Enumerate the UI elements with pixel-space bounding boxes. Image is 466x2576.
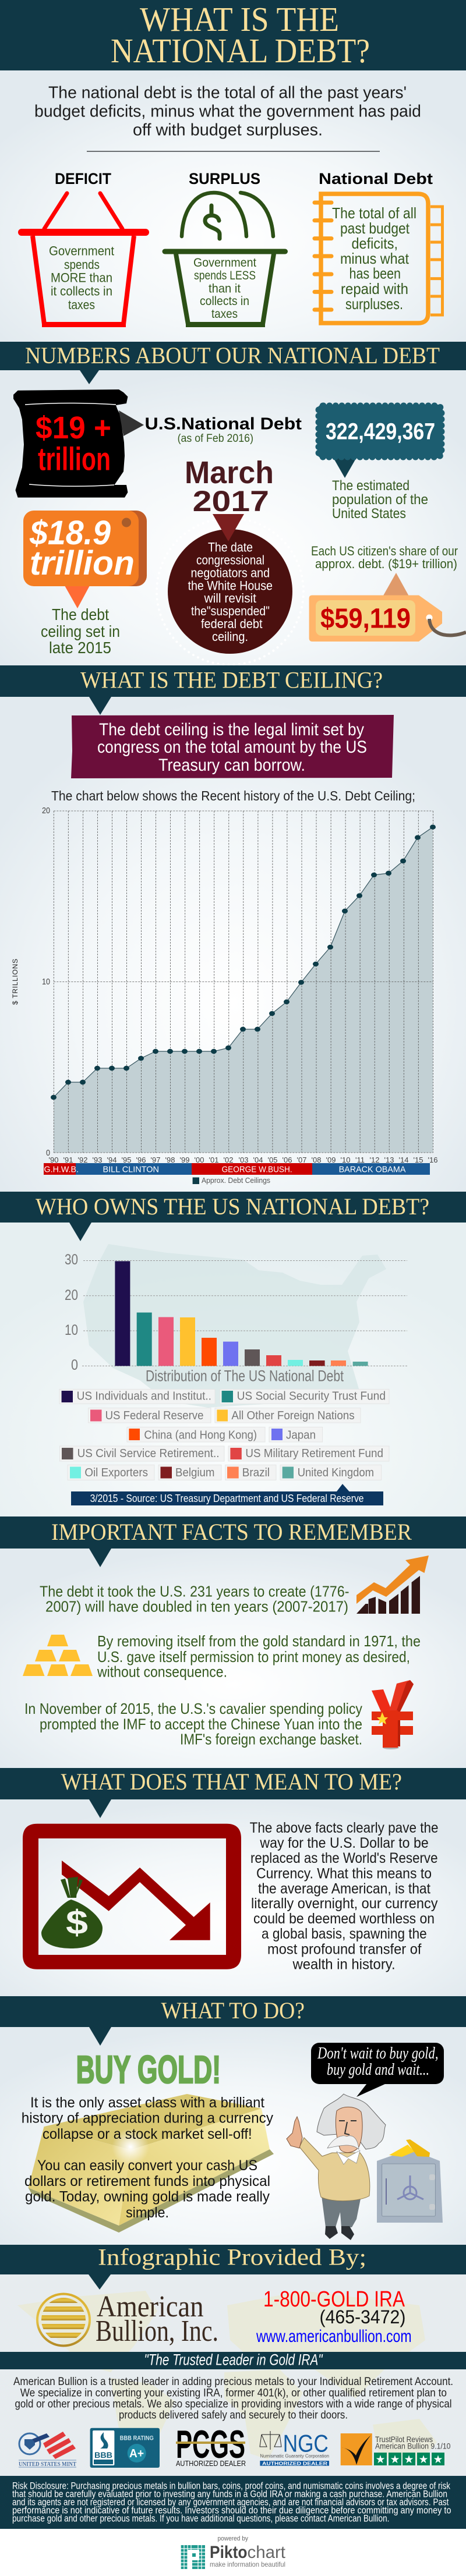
risk disclosure: purchase gold and other precious metals. If you have additional questions, please contact American Bullion. xyxy=(12,2514,389,2524)
logo: NGC xyxy=(260,2430,329,2466)
callout: march 2017 date: the"suspended" xyxy=(191,604,270,618)
speech bubble: buy gold and wait... xyxy=(327,2061,429,2079)
contact details xyxy=(256,2287,412,2346)
logo: PCGS xyxy=(176,2422,246,2468)
text: U.S. national debt: (as of Feb 2016) xyxy=(178,433,253,445)
logo: TrustPilot xyxy=(341,2433,451,2466)
text: what it means: literally overnight, our currency xyxy=(251,1895,438,1912)
chart legend: Approx. Debt Ceilings xyxy=(202,1176,270,1185)
panel: surplus xyxy=(162,170,288,327)
x axis labels: '90 xyxy=(49,1156,58,1164)
deficit text: MORE than xyxy=(51,271,112,285)
text: what it means: replaced as the World's Reserve xyxy=(250,1850,438,1866)
national debt text xyxy=(332,204,416,313)
intro text: off with budget surpluses. xyxy=(133,121,323,140)
icon: piktochart mark xyxy=(181,2545,205,2569)
surplus text: than it xyxy=(209,282,241,296)
intro text: The national debt is the total of all the past years' xyxy=(48,84,407,102)
national debt text: minus what xyxy=(340,250,409,267)
bar chart legend: All Other Foreign Nations xyxy=(231,1409,355,1422)
surplus heading: SURPLUS xyxy=(189,170,260,187)
national debt text: The total of all xyxy=(332,204,416,222)
bar chart: debt holders: Distribution of The US National Debt xyxy=(146,1367,344,1384)
text: population caption: United States xyxy=(332,506,406,522)
text: what it means: a global basis, spawning the xyxy=(262,1926,427,1942)
x axis labels: '04 xyxy=(253,1156,263,1164)
x axis labels: '93 xyxy=(93,1156,102,1164)
footer: powered by piktochart: powered by xyxy=(218,2535,248,2542)
x axis labels: '16 xyxy=(428,1156,437,1164)
x axis labels: '05 xyxy=(268,1156,277,1164)
bar chart: debt holders: 0 xyxy=(71,1357,78,1373)
logo: NGC: AUTHORIZED DEALER xyxy=(262,2461,327,2466)
y axis labels: $ TRILLIONS xyxy=(11,959,19,1005)
x axis labels: '15 xyxy=(414,1156,423,1164)
x axis labels: '09 xyxy=(326,1156,336,1164)
x axis labels: '07 xyxy=(297,1156,306,1164)
fact: debt doubled: 2007) will have doubled in ten years (2007-2017) xyxy=(45,1598,348,1615)
callout: population xyxy=(317,405,443,478)
legs and shoes xyxy=(322,2196,361,2240)
x axis labels: '97 xyxy=(151,1156,160,1164)
x axis labels: '02 xyxy=(224,1156,233,1164)
section heading: who owns xyxy=(0,1192,466,1241)
text: debt ceiling caption: ceiling set in xyxy=(41,622,120,640)
text: debt ceiling caption: The debt xyxy=(52,605,109,623)
callout: march 2017 date: the White House xyxy=(188,579,273,593)
logo: American Bullion: American xyxy=(97,2290,204,2323)
section heading: what to do xyxy=(0,1996,466,2046)
section heading: what does it mean: WHAT DOES THAT MEAN TO ME? xyxy=(61,1769,402,1795)
bar chart legend: US Individuals and Institut.. xyxy=(77,1390,211,1403)
icon: orange notebook xyxy=(315,194,443,323)
icon: red basket xyxy=(18,193,149,327)
fact: IMF yuan xyxy=(24,1700,362,1748)
footer: powered by piktochart: chart xyxy=(247,2543,286,2562)
x axis labels: '08 xyxy=(312,1156,321,1164)
logo: BBB rating: BBB xyxy=(94,2450,112,2460)
text: what it means: the average American, is that xyxy=(258,1881,430,1897)
callout: $19 trillion scroll xyxy=(13,389,128,498)
x axis labels: '06 xyxy=(283,1156,292,1164)
illustration: safe with gold xyxy=(377,2139,443,2223)
title banner xyxy=(0,0,466,70)
text: what it means: The above facts clearly pave the xyxy=(250,1820,438,1836)
surplus text: Government xyxy=(193,256,256,270)
x axis labels: '01 xyxy=(209,1156,218,1164)
text: population caption: The estimated xyxy=(332,478,409,494)
text: population caption xyxy=(332,478,428,522)
bar chart legend: Brazil xyxy=(242,1466,270,1479)
y axis labels: 0 xyxy=(46,1148,50,1158)
section heading: numbers xyxy=(0,342,466,384)
logo: PCGS: AUTHORIZED DEALER xyxy=(176,2460,246,2468)
x axis labels: '98 xyxy=(165,1156,175,1164)
x axis labels: '00 xyxy=(195,1156,204,1164)
section heading: what does it mean xyxy=(0,1768,466,1818)
president bar: GEORGE W.BUSH. xyxy=(222,1165,292,1175)
president bar: BILL CLINTON xyxy=(103,1165,159,1175)
line chart: debt ceiling history xyxy=(11,806,437,1185)
sweater xyxy=(299,2138,370,2201)
icon: rising chart xyxy=(356,1555,429,1614)
text: debt ceiling caption xyxy=(41,605,120,657)
logo: BBB rating: A+ xyxy=(129,2447,144,2460)
deficit text: Government xyxy=(49,244,114,258)
title banner: NATIONAL DEBT? xyxy=(111,31,370,70)
callout: march 2017 date: federal debt xyxy=(201,616,262,631)
callout: march 2017 date: negotiators and xyxy=(191,565,270,580)
callout: $18.9 trillion tag: $18.9 xyxy=(29,514,111,552)
bar chart legend: US Civil Service Retirement.. xyxy=(77,1447,219,1460)
x axis labels: '10 xyxy=(341,1156,350,1164)
text: buy gold body: It is the only asset class with a brilliant xyxy=(30,2095,264,2111)
y axis labels: 20 xyxy=(42,806,50,816)
national debt text: surpluses. xyxy=(345,295,403,313)
national debt text: has been xyxy=(350,265,401,282)
bar chart legend: US Military Retirement Fund xyxy=(245,1447,383,1460)
section heading: provided by: Infographic Provided By; xyxy=(98,2244,366,2270)
icon: gold bars pile xyxy=(23,1635,93,1676)
logo: BBB rating xyxy=(90,2428,160,2468)
bar chart legend: Oil Exporters xyxy=(84,1466,148,1479)
logo: American Bullion: Bullion, Inc. xyxy=(96,2315,218,2348)
deficit text xyxy=(49,244,114,312)
logo: American Bullion xyxy=(35,2290,218,2348)
x axis labels: '11 xyxy=(355,1156,365,1164)
text: chart intro: The chart below shows the Recent history of the U.S. Debt Ceiling; xyxy=(51,788,415,803)
x axis labels xyxy=(49,1156,437,1164)
logo: TrustPilot: ★ xyxy=(375,2454,386,2466)
bar chart legend: United Kingdom xyxy=(298,1466,374,1479)
contact details: 1-800-GOLD IRA xyxy=(263,2287,405,2312)
text: what it means: could be deemed worthless on xyxy=(253,1911,435,1927)
text: citizen share caption: approx. debt. ($19+ trillion) xyxy=(315,557,457,571)
x axis labels: '94 xyxy=(107,1156,116,1164)
callout: march 2017 date: ceiling. xyxy=(212,629,248,644)
footer: powered by piktochart: Pikto xyxy=(210,2543,247,2562)
raised arm and hand xyxy=(287,2117,302,2148)
logo: TrustPilot: TrustPilot Reviews xyxy=(375,2435,433,2444)
tagline band xyxy=(0,2351,466,2369)
x axis labels: '91 xyxy=(63,1156,73,1164)
fact: IMF yuan: prompted the IMF to accept the Chinese Yuan into the xyxy=(40,1716,362,1733)
icon: money bag: $ xyxy=(66,1904,88,1941)
president bar: BARACK OBAMA xyxy=(339,1165,405,1175)
logo: NGC: NGC xyxy=(283,2430,329,2457)
callout: march 2017 date: March xyxy=(185,455,274,490)
president bar xyxy=(44,1163,430,1175)
callout: $59,119 price tag: $59,119 xyxy=(320,604,411,635)
text: what it means: most profound transfer of xyxy=(267,1941,422,1958)
background map: USA xyxy=(83,1244,386,1408)
bar chart legend: Japan xyxy=(286,1429,316,1441)
surplus text: spends LESS xyxy=(194,269,256,282)
national debt heading: National Debt xyxy=(319,170,433,187)
text: population caption: population of the xyxy=(332,492,428,508)
text: buy gold body: You can easily convert your cash US xyxy=(37,2157,257,2174)
section heading: what to do: WHAT TO DO? xyxy=(161,1997,305,2024)
x axis labels: '03 xyxy=(239,1156,248,1164)
x axis labels: '96 xyxy=(136,1156,146,1164)
deficit text: it collects in xyxy=(51,284,112,298)
callout: $19 trillion scroll: trillion xyxy=(38,440,111,477)
text: buy gold body xyxy=(22,2095,273,2221)
section heading: important facts: IMPORTANT FACTS TO REMEMBER xyxy=(51,1519,412,1545)
x axis labels: '95 xyxy=(122,1156,131,1164)
speech bubble xyxy=(311,2043,444,2097)
background: world map xyxy=(17,2291,437,2468)
section heading: provided by xyxy=(0,2244,466,2290)
contact details: (465-3472) xyxy=(319,2306,405,2327)
logo: NGC: Numismatic Guaranty Corporation xyxy=(260,2454,329,2459)
intro text xyxy=(34,84,421,140)
intro text: budget deficits, minus what the government has paid xyxy=(34,102,421,121)
callout: debt ceiling definition: The debt ceiling is the legal limit set by xyxy=(99,720,364,739)
callout: $18.9 trillion tag xyxy=(23,511,147,608)
logo: BBB rating: BBB RATING xyxy=(120,2435,154,2442)
logo: TrustPilot: ★ xyxy=(433,2454,443,2466)
fact: gold standard: U.S. gave itself permission to print money as desired, xyxy=(97,1648,410,1666)
panel: national debt xyxy=(315,170,443,323)
icon: falling chart frame xyxy=(23,1824,241,1969)
collar xyxy=(337,2150,360,2164)
text: U.S. national debt: U.S.National Debt xyxy=(144,414,302,433)
callout: population: 322,429,367 xyxy=(326,419,435,445)
source note: 3/2015 - Source: US Treasury Department and US Federal Reserve xyxy=(90,1493,363,1504)
surplus text: taxes xyxy=(211,307,238,321)
logo: TrustPilot: ★ xyxy=(418,2454,429,2466)
x axis labels: '14 xyxy=(399,1156,408,1164)
illustration: gold bar xyxy=(28,2094,274,2233)
callout: march 2017 date: congressional xyxy=(196,553,264,568)
illustration: einstein cartoon xyxy=(287,2094,386,2240)
fact: debt doubled xyxy=(40,1583,350,1615)
bar chart legend: US Federal Reserve xyxy=(105,1409,204,1422)
eyes xyxy=(339,2121,356,2135)
text: buy gold body: dollars or retirement funds into physical xyxy=(24,2173,270,2189)
callout: $18.9 trillion tag: trillion xyxy=(30,544,135,582)
text: what it means: wealth in history. xyxy=(292,1957,396,1973)
fact: gold standard: without consequence. xyxy=(97,1663,227,1681)
deficit text: spends xyxy=(64,257,100,272)
data points xyxy=(51,824,436,1100)
bar chart: debt holders: 20 xyxy=(65,1287,78,1303)
source note xyxy=(71,1484,383,1505)
mustache xyxy=(327,2136,359,2149)
callout: debt ceiling definition xyxy=(71,715,394,778)
title banner: WHAT IS THE xyxy=(140,0,339,38)
hair xyxy=(317,2094,386,2149)
text: U.S. national debt xyxy=(144,414,302,445)
text: debt ceiling caption: late 2015 xyxy=(49,639,111,657)
icon: green basket with dollar xyxy=(162,193,288,327)
logo: PCGS: PCGS xyxy=(176,2422,245,2467)
text: what it means: way for the U.S. Dollar to be xyxy=(259,1835,429,1851)
footer: powered by piktochart xyxy=(181,2535,286,2569)
callout: debt ceiling definition: Treasury can borrow. xyxy=(158,756,305,775)
y axis labels: 10 xyxy=(42,977,50,987)
callout: debt ceiling definition: congress on the total amount by the US xyxy=(97,738,367,757)
fact: IMF yuan: In November of 2015, the U.S.'s cavalier spending policy xyxy=(24,1700,362,1717)
callout: $19 trillion scroll: $19 + xyxy=(36,410,111,445)
section heading: numbers: NUMBERS ABOUT OUR NATIONAL DEBT xyxy=(25,342,440,368)
logo: US Mint xyxy=(19,2432,77,2468)
fact: IMF yuan: IMF's foreign exchange basket. xyxy=(180,1731,362,1748)
icon: money bag xyxy=(41,1877,103,1948)
bar chart legend: US Social Security Trust Fund xyxy=(237,1390,386,1403)
text: buy gold body: gold. Today, owning gold is made really xyxy=(25,2189,270,2205)
bar chart legend xyxy=(59,1389,389,1480)
x axis labels: '99 xyxy=(180,1156,189,1164)
section heading: who owns: WHO OWNS THE US NATIONAL DEBT? xyxy=(36,1193,429,1220)
text: buy gold body: history of appreciation during a currency xyxy=(22,2110,273,2127)
deficit text: taxes xyxy=(68,297,95,312)
national debt text: past budget xyxy=(340,219,410,237)
deficit heading: DEFICIT xyxy=(55,170,111,187)
section heading: debt ceiling: WHAT IS THE DEBT CEILING? xyxy=(80,667,383,693)
bar chart: debt holders xyxy=(65,1252,407,1384)
callout: march 2017 date: will revisit xyxy=(204,591,256,605)
contact details: www.americanbullion.com xyxy=(256,2327,412,2346)
footer: powered by piktochart: make information beautiful xyxy=(210,2560,285,2568)
face xyxy=(336,2107,362,2153)
fact: debt doubled: The debt it took the U.S. 231 years to create (1776- xyxy=(40,1583,350,1600)
bar chart: debt holders: 30 xyxy=(65,1252,78,1268)
text: buy gold body: collapse or a stock market sell-off! xyxy=(43,2126,252,2142)
y axis labels xyxy=(11,806,50,1158)
text: citizen share caption xyxy=(311,544,458,571)
text: what it means: Currency. What this means to xyxy=(256,1866,432,1882)
bar chart: debt holders: 10 xyxy=(65,1322,78,1338)
surplus text: collects in xyxy=(200,295,249,308)
x axis labels: '92 xyxy=(78,1156,87,1164)
logo: TrustPilot: ★ xyxy=(404,2454,414,2466)
text: buy gold body: simple. xyxy=(126,2205,169,2221)
callout: march 2017 date: The date xyxy=(208,540,253,554)
heading: buy gold: BUY GOLD! xyxy=(76,2048,221,2092)
logo: TrustPilot: American Bullion 9.1/10 xyxy=(375,2442,451,2451)
panel: deficit xyxy=(18,170,149,327)
bar chart legend: Belgium xyxy=(175,1466,214,1479)
speech bubble: Don't wait to buy gold, xyxy=(317,2044,438,2063)
x axis labels: '12 xyxy=(370,1156,379,1164)
section heading: debt ceiling xyxy=(0,665,466,715)
callout: march 2017 date: 2017 xyxy=(193,485,269,518)
risk disclosure xyxy=(0,2476,466,2529)
national debt text: repaid with xyxy=(341,280,408,297)
text: about american bullion: products delivered safely and securely to their doors. xyxy=(119,2408,348,2421)
callout: march 2017 date xyxy=(157,455,303,665)
national debt text: deficits, xyxy=(352,235,398,252)
icon: red yuan sign xyxy=(372,1680,414,1749)
bar chart legend: China (and Hong Kong) xyxy=(144,1429,257,1441)
text: what it means xyxy=(250,1820,438,1973)
section heading: important facts xyxy=(0,1516,466,1567)
logo: US Mint: UNITED STATES MINT xyxy=(19,2461,77,2468)
surplus text xyxy=(193,256,256,321)
president bar: G.H.W.B. xyxy=(44,1165,79,1175)
logo: TrustPilot: ★ xyxy=(390,2454,400,2466)
fact: gold standard: By removing itself from the gold standard in 1971, the xyxy=(97,1632,421,1650)
x axis labels: '13 xyxy=(384,1156,394,1164)
callout: $59,119 price tag xyxy=(309,573,466,642)
arrow: scroll pointer xyxy=(119,410,144,436)
text: about american bullion xyxy=(13,2375,453,2421)
tagline band: "The Trusted Leader in Gold IRA" xyxy=(144,2351,323,2369)
fact: gold standard xyxy=(97,1632,421,1681)
